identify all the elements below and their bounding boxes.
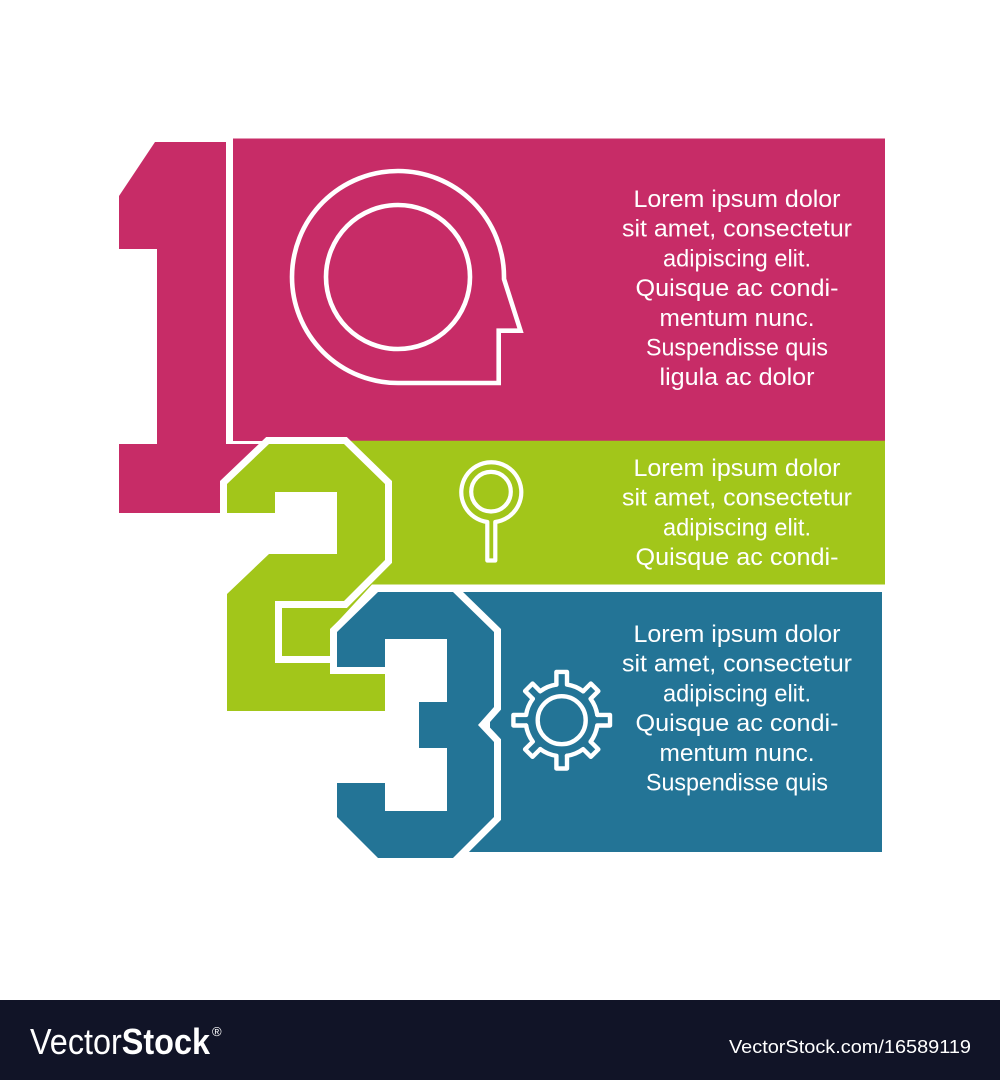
text block: step three: Lorem ipsum dolor xyxy=(634,621,841,648)
icon: gear xyxy=(513,672,610,768)
text block: step one: sit amet, consectetur xyxy=(622,216,852,243)
head outline xyxy=(292,171,520,383)
text block: step one: Lorem ipsum dolor xyxy=(634,186,841,213)
text block: step one: Suspendisse quis xyxy=(646,334,828,362)
inner ring xyxy=(471,472,511,512)
registered mark: ® xyxy=(212,1024,222,1039)
text block: step one: adipiscing elit. xyxy=(663,245,811,272)
numeral 1 xyxy=(119,142,262,513)
text block: step three: mentum nunc. xyxy=(660,740,814,767)
text block: step two xyxy=(622,455,852,571)
panel: green step two xyxy=(278,441,885,670)
footer logo: VectorStock xyxy=(30,1021,211,1062)
text block: step two: Lorem ipsum dolor xyxy=(634,455,841,482)
text block: step three: Suspendisse quis xyxy=(646,770,828,796)
footer image id: VectorStock.com/16589119 xyxy=(729,1036,971,1057)
numeral 2 xyxy=(227,444,385,711)
text block: step three: Quisque ac condi- xyxy=(636,710,838,737)
text block: step three xyxy=(622,621,852,796)
text block: step one: mentum nunc. xyxy=(660,305,814,332)
icon: magnifier key xyxy=(461,462,521,560)
inner circle xyxy=(326,205,470,349)
footer bar xyxy=(0,1000,1000,1080)
text block: step two: adipiscing elit. xyxy=(663,514,811,541)
text block: step one: ligula ac dolor xyxy=(660,364,815,391)
text block: step one: Quisque ac condi- xyxy=(636,275,838,302)
icon: head with circle xyxy=(292,171,520,383)
text block: step one xyxy=(622,186,852,391)
text block: step three: sit amet, consectetur xyxy=(622,651,852,678)
panel: magenta step one xyxy=(233,138,885,441)
panel: blue step three xyxy=(455,592,882,852)
text block: step two: sit amet, consectetur xyxy=(622,485,852,512)
text block: step two: Quisque ac condi- xyxy=(636,544,838,571)
numeral 3 xyxy=(337,592,494,858)
outer ring and handle xyxy=(461,462,521,560)
text block: step three: adipiscing elit. xyxy=(663,680,811,707)
